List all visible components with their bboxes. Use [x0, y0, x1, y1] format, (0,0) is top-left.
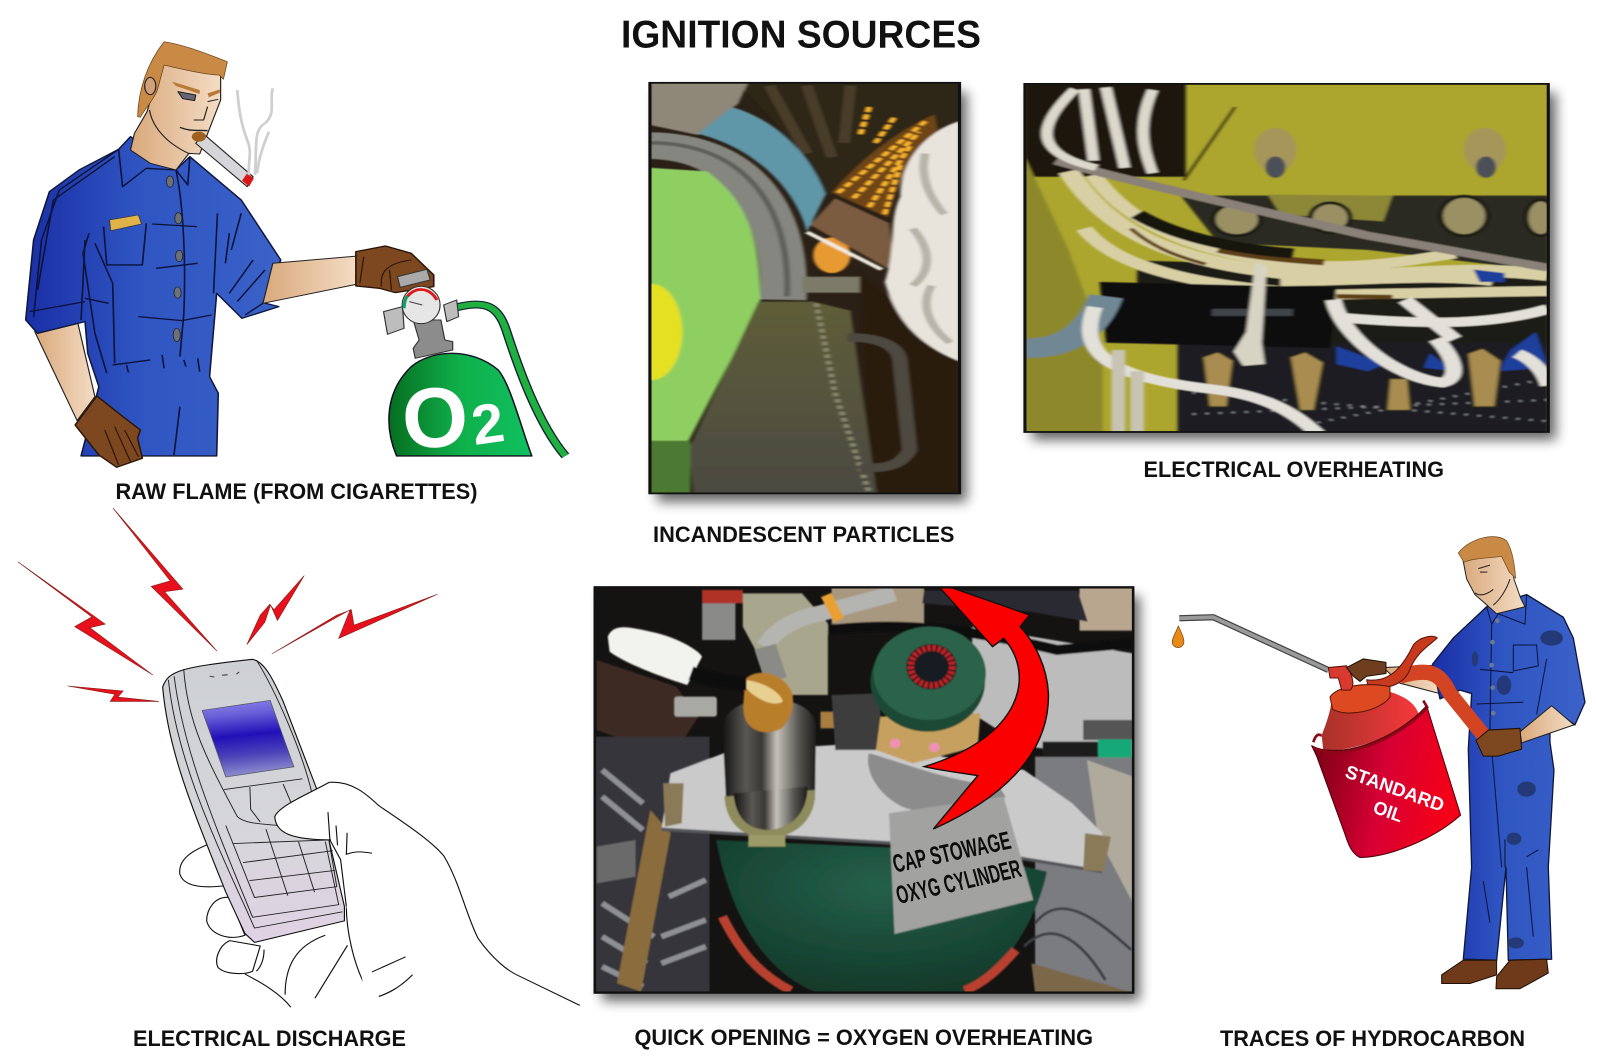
label: electrical overheating: ELECTRICAL OVERHEATING — [1144, 457, 1444, 482]
regulator — [384, 269, 459, 358]
illustration: worker smoking beside oxygen cylinder — [26, 42, 565, 467]
boots — [1442, 959, 1548, 989]
sparks — [832, 114, 938, 218]
bottom green sliver — [650, 441, 690, 493]
guard plate — [689, 302, 877, 493]
glove knuckle lines — [360, 257, 411, 290]
white protective sleeve — [608, 627, 702, 685]
can lettering: STANDARD — [1343, 761, 1447, 816]
top-centre fittings — [702, 590, 743, 603]
black hose to fitting — [691, 673, 746, 683]
cylinder O2 marking: 2 — [468, 390, 508, 457]
illustration: worker with oil can — [1172, 537, 1585, 989]
forearm — [1520, 706, 1574, 743]
label: electrical discharge: ELECTRICAL DISCHARGE — [133, 1026, 406, 1051]
photo shadow: incandescent particles — [657, 92, 967, 502]
speckles — [1193, 378, 1548, 425]
white mounting plate — [661, 743, 1102, 872]
label: raw flame: RAW FLAME (FROM CIGARETTES) — [116, 479, 478, 504]
cigarette pack in pocket — [110, 215, 142, 231]
neck and face — [1462, 550, 1525, 614]
small nut — [674, 697, 717, 717]
spout collar — [1328, 666, 1353, 690]
dark area behind wires — [1137, 261, 1548, 343]
label: incandescent particles: INCANDESCENT PARTICLES — [653, 522, 954, 547]
brass fitting — [743, 673, 793, 732]
cap seal — [906, 644, 957, 689]
can body — [1312, 706, 1461, 857]
cream wire bundle — [1069, 171, 1548, 295]
phone screen — [202, 700, 294, 777]
right dark area — [860, 271, 960, 493]
right lower grey — [1035, 757, 1133, 993]
label: traces of hydrocarbon: TRACES OF HYDROCARBON — [1220, 1026, 1525, 1051]
handle — [847, 337, 910, 468]
ear — [145, 77, 156, 95]
plate rail — [661, 829, 1102, 872]
photo border — [595, 587, 1133, 993]
green cap rim — [870, 632, 985, 732]
buttons — [1489, 618, 1500, 715]
right green fitting — [1042, 742, 1098, 755]
spout highlight — [1179, 617, 1328, 670]
dark streak — [1184, 107, 1235, 180]
cylinder O2 marking: O — [400, 369, 471, 468]
photo: burnt wiring — [1025, 84, 1556, 434]
can lettering: OIL — [1371, 796, 1406, 826]
green panel — [650, 168, 760, 441]
hose — [457, 304, 565, 456]
lower hand lines — [245, 906, 413, 1007]
upper-left maroon panel — [597, 660, 698, 757]
lower-left clutter — [595, 737, 710, 993]
glove at side — [75, 396, 142, 467]
workpiece — [810, 198, 892, 268]
photo shadow: electrical overheating — [1032, 93, 1556, 440]
wooden strip — [617, 810, 671, 992]
grey housing — [650, 83, 748, 135]
photo: grinder with sparks — [620, 83, 960, 493]
photo border — [650, 83, 960, 493]
can cone — [1322, 692, 1420, 751]
coverall seams — [1477, 595, 1547, 937]
worker neck and face — [130, 63, 221, 170]
eyebrows — [172, 82, 220, 97]
white braided wires — [1090, 300, 1548, 434]
glove on regulator — [356, 246, 434, 293]
grey strap — [868, 753, 1006, 814]
top bolts — [1254, 128, 1506, 178]
photo border — [1025, 84, 1548, 432]
gauge arc — [404, 290, 437, 308]
yellow disc — [652, 283, 684, 381]
bag lettering: CAP STOWAGE — [890, 826, 1014, 878]
speaker slots — [210, 672, 239, 677]
brass valve — [876, 713, 980, 763]
side glove finger lines — [105, 427, 138, 465]
title: IGNITION SOURCES — [621, 14, 981, 56]
worker left forearm — [35, 320, 95, 421]
grey wheel ring — [650, 146, 784, 300]
top-left wires — [1047, 87, 1153, 173]
right grey bracket — [972, 627, 1133, 757]
bag lettering: OXYG CYLINDER — [893, 854, 1024, 909]
cigarette — [192, 132, 254, 187]
background stripes — [770, 86, 851, 157]
red tank bands — [722, 917, 1016, 991]
upper beige wall — [1080, 587, 1133, 631]
can neck — [1330, 685, 1390, 713]
plate under wheel — [803, 277, 860, 293]
illustration: mobile phone in hand with sparks — [18, 508, 580, 1007]
facial features — [149, 92, 218, 154]
stowage bag — [889, 797, 1033, 934]
worker hair — [138, 42, 227, 117]
photo: oxygen cylinder with quick-opening arrow — [595, 582, 1133, 993]
back fingers — [180, 844, 260, 974]
oxygen cylinder — [389, 353, 532, 456]
black nut and brass stem — [820, 712, 835, 728]
grease stains — [1472, 630, 1563, 948]
top placard — [922, 591, 1088, 622]
coverall seams and pocket — [30, 149, 265, 455]
glow — [813, 237, 851, 273]
corrugated black hose — [828, 627, 1131, 650]
trigger — [1367, 636, 1437, 688]
green cap top — [873, 627, 986, 720]
charred wires — [1056, 161, 1548, 268]
tan ring — [724, 790, 815, 838]
red quick-opening arrow — [924, 582, 1048, 829]
can handle — [1400, 672, 1485, 737]
guard weld seam — [816, 303, 869, 493]
dark nut band — [1181, 196, 1548, 271]
phone body — [163, 659, 344, 942]
hand outline — [275, 782, 580, 1005]
can rim — [1313, 701, 1427, 752]
arm skin behind can — [1383, 665, 1440, 694]
lightning bolts — [18, 508, 437, 701]
label: quick opening: QUICK OPENING = OXYGEN OVERHEATING — [634, 1025, 1093, 1050]
lower dark terminal block — [1178, 339, 1548, 432]
clamps — [663, 783, 1111, 872]
burn marks — [1131, 228, 1393, 297]
grinding wheel blue — [698, 107, 826, 232]
thumb and hand — [275, 782, 580, 1005]
oxygen tank — [716, 840, 1047, 993]
black connector — [1100, 282, 1336, 348]
lower-right wiring — [1024, 909, 1131, 980]
lower-left wires — [1118, 350, 1137, 432]
steel elbow — [765, 593, 894, 647]
coverall — [1433, 595, 1585, 960]
spout — [1179, 617, 1328, 670]
phone contours — [168, 660, 343, 928]
lower glove — [1476, 728, 1522, 756]
dark machine background — [738, 83, 960, 195]
steel bottle — [722, 698, 816, 803]
worker coverall — [26, 137, 281, 456]
upper glove — [1347, 659, 1386, 681]
pink dots — [890, 739, 900, 748]
cylinder O2 marking — [400, 369, 508, 468]
right forearm — [263, 256, 358, 303]
blue patches — [1336, 270, 1548, 371]
cable tie — [1234, 262, 1267, 366]
terminals — [1203, 348, 1502, 411]
lower-left olive — [1025, 157, 1103, 432]
photo shadow: oxygen cylinder — [602, 596, 1140, 1001]
oil drop — [1172, 626, 1184, 648]
coverall buttons — [166, 176, 183, 342]
grey hose — [1025, 296, 1106, 348]
smoke — [237, 88, 273, 175]
hair — [1458, 537, 1516, 578]
white glove — [885, 121, 960, 361]
row of nuts — [1213, 196, 1556, 236]
top-left dark corner — [1025, 84, 1186, 177]
olive patch between nuts — [1268, 195, 1393, 221]
facial features — [1475, 565, 1510, 605]
bag lettering — [890, 826, 1024, 909]
